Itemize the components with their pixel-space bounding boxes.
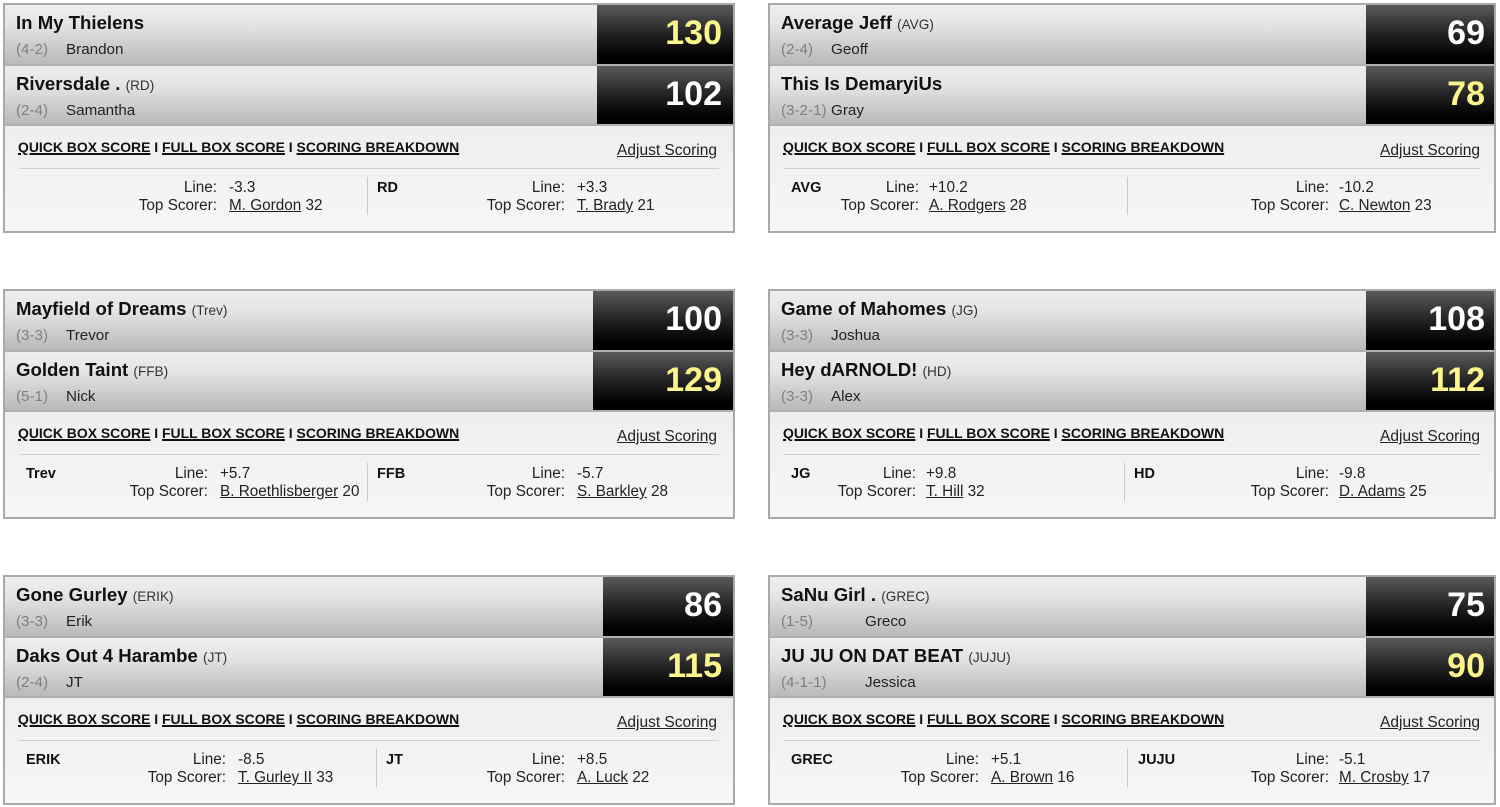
team row: In My Thielens: Brandon	[66, 41, 123, 58]
right line labels: Top Scorer:	[1251, 769, 1329, 786]
right team abbreviation: JUJU	[1138, 752, 1175, 768]
right team abbreviation: RD	[377, 180, 398, 196]
left line labels	[139, 178, 217, 214]
right line values	[1339, 750, 1430, 786]
team row: Average Jeff	[770, 5, 1494, 66]
team row: JU JU ON DAT BEAT: (4-1-1)	[781, 674, 827, 691]
team row: Gone Gurley: 86	[684, 586, 722, 624]
right line labels: Top Scorer:	[487, 769, 565, 786]
team row: Hey dARNOLD!: Alex	[831, 388, 861, 405]
left line values: B. Roethlisberger 20	[220, 483, 359, 500]
team row: Gone Gurley: (3-3)	[16, 613, 48, 630]
team row: Daks Out 4 Harambe	[5, 638, 733, 698]
right line labels: Line:	[1296, 464, 1329, 482]
team row: Average Jeff: Average Jeff (AVG)	[781, 12, 934, 33]
left line values: +5.1	[991, 750, 1021, 768]
left team abbreviation: ERIK	[26, 752, 61, 768]
right line values: D. Adams 25	[1339, 483, 1427, 500]
left line values: T. Gurley II 33	[238, 769, 333, 786]
left line values: +5.7	[220, 464, 250, 482]
team row: This Is DemaryiUs: 78	[1447, 75, 1485, 113]
team row: Mayfield of Dreams	[5, 291, 733, 352]
links: QUICK BOX SCORE I FULL BOX SCORE I SCORING BREAKDOWN	[18, 711, 459, 727]
team row: Mayfield of Dreams: Mayfield of Dreams (Trev)	[16, 298, 227, 319]
left line values: +9.8	[926, 464, 956, 482]
links: QUICK BOX SCORE I FULL BOX SCORE I SCORING BREAKDOWN	[783, 425, 1224, 441]
team row: Gone Gurley: Gone Gurley (ERIK)	[16, 584, 174, 605]
left line values: M. Gordon 32	[229, 197, 323, 214]
right line values: -5.7	[577, 464, 603, 482]
right line values	[1339, 464, 1427, 500]
team row: SaNu Girl: (1-5)	[781, 613, 813, 630]
right line values	[577, 750, 649, 786]
left line values	[926, 464, 985, 500]
team row: JU JU ON DAT BEAT	[770, 638, 1494, 698]
team row: Average Jeff: Geoff	[831, 41, 868, 58]
left team abbreviation: AVG	[791, 180, 821, 196]
team row: This Is DemaryiUs	[770, 66, 1494, 126]
team row: In My Thielens	[5, 5, 733, 66]
team row: Average Jeff: 69	[1447, 14, 1485, 52]
left line labels	[841, 178, 919, 214]
right line values	[1339, 178, 1432, 214]
left team abbreviation: GREC	[791, 752, 833, 768]
team row: This Is DemaryiUs: Gray	[831, 102, 864, 119]
left line labels: Line:	[883, 464, 916, 482]
adjust scoring link: Adjust Scoring	[617, 428, 717, 445]
left line labels	[148, 750, 226, 786]
left line labels: Top Scorer:	[841, 197, 919, 214]
team row: Golden Taint: Golden Taint (FFB)	[16, 359, 168, 380]
right line labels	[1251, 750, 1329, 786]
team row: Riversdale: Riversdale . (RD)	[16, 73, 154, 94]
left line labels: Top Scorer:	[130, 483, 208, 500]
right line labels: Line:	[532, 464, 565, 482]
team row: In My Thielens: 130	[665, 14, 722, 52]
left team abbreviation: JG	[791, 466, 810, 482]
team row: JU JU ON DAT BEAT: Jessica	[865, 674, 916, 691]
right line values	[577, 178, 654, 214]
right line values: -5.1	[1339, 750, 1365, 768]
team row: SaNu Girl: 75	[1447, 586, 1485, 624]
adjust scoring link: Adjust Scoring	[1380, 428, 1480, 445]
team row: Mayfield of Dreams: Trevor	[66, 327, 109, 344]
links: QUICK BOX SCORE I FULL BOX SCORE I SCORING BREAKDOWN	[783, 711, 1224, 727]
right line labels: Line:	[532, 178, 565, 196]
left line labels: Top Scorer:	[838, 483, 916, 500]
left line labels: Line:	[886, 178, 919, 196]
right line values: M. Crosby 17	[1339, 769, 1430, 786]
right team abbreviation: FFB	[377, 466, 405, 482]
team row: SaNu Girl	[770, 577, 1494, 638]
team row: Riversdale: (2-4)	[16, 102, 48, 119]
left line values: A. Rodgers 28	[929, 197, 1027, 214]
adjust scoring link: Adjust Scoring	[1380, 142, 1480, 159]
team row: This Is DemaryiUs: (3-2-1)	[781, 102, 827, 119]
team row: Hey dARNOLD!: (3-3)	[781, 388, 813, 405]
team row: Hey dARNOLD!: Hey dARNOLD! (HD)	[781, 359, 951, 380]
right line values: S. Barkley 28	[577, 483, 668, 500]
team row: Mayfield of Dreams: 100	[665, 300, 722, 338]
team row: Game of Mahomes	[770, 291, 1494, 352]
right line labels	[1251, 464, 1329, 500]
team row: SaNu Girl: Greco	[865, 613, 906, 630]
team row: This Is DemaryiUs: This Is DemaryiUs	[781, 73, 942, 94]
team row: In My Thielens: In My Thielens	[16, 12, 144, 33]
left line labels: Line:	[184, 178, 217, 196]
team row: Daks Out 4 Harambe: Daks Out 4 Harambe (JT)	[16, 645, 227, 666]
left line values	[220, 464, 359, 500]
left line labels	[130, 464, 208, 500]
team row: Daks Out 4 Harambe: 115	[667, 647, 722, 685]
adjust scoring link: Adjust Scoring	[1380, 714, 1480, 731]
team row: Golden Taint: Nick	[66, 388, 96, 405]
right line values: +8.5	[577, 750, 607, 768]
right team abbreviation: JT	[386, 752, 403, 768]
panel: matchup In My Thielens vs Riversdale	[3, 3, 735, 233]
team row: JU JU ON DAT BEAT: JU JU ON DAT BEAT (JUJU)	[781, 645, 1011, 666]
team row: SaNu Girl: SaNu Girl . (GREC)	[781, 584, 930, 605]
left line labels: Line:	[946, 750, 979, 768]
panel: matchup Gone Gurley vs Daks Out 4 Harambe	[3, 575, 735, 805]
team row: Hey dARNOLD!	[770, 352, 1494, 412]
left line labels: Top Scorer:	[139, 197, 217, 214]
panel: matchup Mayfield of Dreams vs Golden Taint	[3, 289, 735, 519]
team row: Riversdale: 102	[665, 75, 722, 113]
left team abbreviation: Trev	[26, 466, 56, 482]
right line labels: Top Scorer:	[1251, 197, 1329, 214]
right line values	[577, 464, 668, 500]
team row: Mayfield of Dreams: (3-3)	[16, 327, 48, 344]
left line values: +10.2	[929, 178, 968, 196]
adjust scoring link: Adjust Scoring	[617, 142, 717, 159]
right line values: -10.2	[1339, 178, 1374, 196]
right line labels: Line:	[532, 750, 565, 768]
adjust scoring link: Adjust Scoring	[617, 714, 717, 731]
right line labels	[487, 464, 565, 500]
right line labels: Top Scorer:	[1251, 483, 1329, 500]
team row: Game of Mahomes: Joshua	[831, 327, 880, 344]
team row: JU JU ON DAT BEAT: 90	[1447, 647, 1485, 685]
team row: Riversdale: Samantha	[66, 102, 135, 119]
left line values: T. Hill 32	[926, 483, 985, 500]
left line values	[929, 178, 1027, 214]
team row: Golden Taint	[5, 352, 733, 412]
right line values: +3.3	[577, 178, 607, 196]
panel: matchup Average Jeff vs This Is DemaryiUs	[768, 3, 1496, 233]
team row: Daks Out 4 Harambe: JT	[66, 674, 83, 691]
team row: Average Jeff: (2-4)	[781, 41, 813, 58]
left line values: -8.5	[238, 750, 264, 768]
team row: Daks Out 4 Harambe: (2-4)	[16, 674, 48, 691]
left line labels: Line:	[175, 464, 208, 482]
team row: Game of Mahomes: 108	[1428, 300, 1485, 338]
left line labels: Top Scorer:	[148, 769, 226, 786]
right line labels: Top Scorer:	[487, 483, 565, 500]
left line values: -3.3	[229, 178, 255, 196]
right line labels: Top Scorer:	[487, 197, 565, 214]
team row: Golden Taint: 129	[665, 361, 722, 399]
panel: matchup SaNu Girl vs JU JU ON DAT BEAT	[768, 575, 1496, 805]
team row: Game of Mahomes: Game of Mahomes (JG)	[781, 298, 978, 319]
team row: Hey dARNOLD!: 112	[1430, 361, 1485, 399]
left line labels	[838, 464, 916, 500]
left line labels: Line:	[193, 750, 226, 768]
right line labels: Line:	[1296, 750, 1329, 768]
right line values: A. Luck 22	[577, 769, 649, 786]
panel: matchup Game of Mahomes vs Hey dARNOLD!	[768, 289, 1496, 519]
right line labels	[487, 750, 565, 786]
left line labels	[901, 750, 979, 786]
right line values: -9.8	[1339, 464, 1365, 482]
right line values: T. Brady 21	[577, 197, 654, 214]
team row: Riversdale	[5, 66, 733, 126]
left line values	[238, 750, 333, 786]
right line values: C. Newton 23	[1339, 197, 1432, 214]
team row: Game of Mahomes: (3-3)	[781, 327, 813, 344]
team row: In My Thielens: (4-2)	[16, 41, 48, 58]
links: QUICK BOX SCORE I FULL BOX SCORE I SCORING BREAKDOWN	[18, 425, 459, 441]
team row: Gone Gurley: Erik	[66, 613, 92, 630]
team row: Gone Gurley	[5, 577, 733, 638]
left line values	[991, 750, 1074, 786]
left line values	[229, 178, 323, 214]
links: QUICK BOX SCORE I FULL BOX SCORE I SCORING BREAKDOWN	[783, 139, 1224, 155]
team row: Golden Taint: (5-1)	[16, 388, 48, 405]
links: QUICK BOX SCORE I FULL BOX SCORE I SCORING BREAKDOWN	[18, 139, 459, 155]
left line values: A. Brown 16	[991, 769, 1074, 786]
right line labels	[1251, 178, 1329, 214]
right line labels: Line:	[1296, 178, 1329, 196]
right team abbreviation: HD	[1134, 466, 1155, 482]
right line labels	[487, 178, 565, 214]
left line labels: Top Scorer:	[901, 769, 979, 786]
